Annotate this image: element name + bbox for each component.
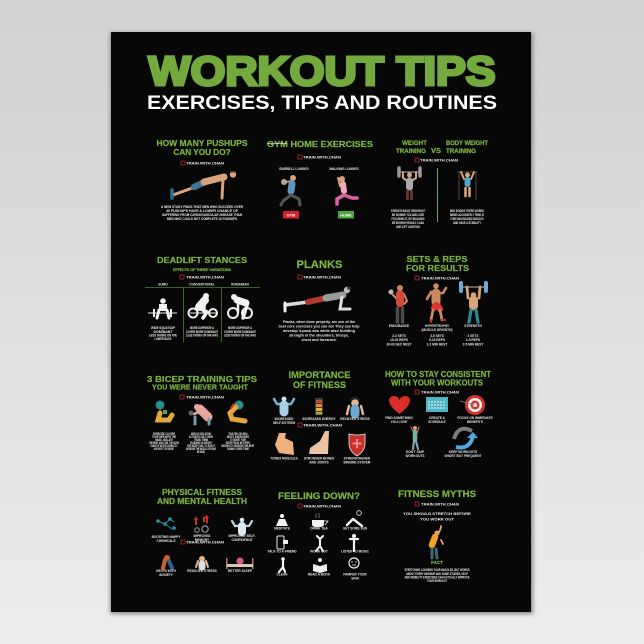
labels: SHORT BUT FREQUENT <box>444 454 482 458</box>
text block <box>149 326 177 341</box>
badge: TRAIN.WITH.CHAN <box>186 275 225 279</box>
text block: THE BICEP CURL TO ROW IT <box>187 444 215 448</box>
subheading: EFFECTS OF THREE VARIATIONS <box>173 268 232 272</box>
icon: walking lunge figure <box>337 176 357 204</box>
icon: flexing torso <box>232 518 252 532</box>
heading: FITNESS MYTHS <box>398 489 476 499</box>
text block <box>186 326 218 338</box>
text block <box>404 568 470 583</box>
badge: TRAIN.WITH.CHAN <box>303 155 342 159</box>
icon: mask face <box>349 558 359 568</box>
labels: IMPROVED SELF- <box>228 534 256 538</box>
text block: MUSCLE ISOLATION <box>191 432 211 436</box>
text block: TRAIN THE LONG HEAD <box>228 432 248 436</box>
gym button: GYM <box>287 213 295 217</box>
icon: cycle arrows <box>454 429 478 448</box>
text block: AND HAVE A STABILITY <box>453 221 482 225</box>
labels: SELF-ESTEEM <box>273 421 295 425</box>
text block: SUFFERING FROM CARDIOVASCULAR DISEASE THAN <box>162 213 243 217</box>
text block: WIDE SQUATSUP <box>151 326 176 330</box>
rep numbers: 3 SETS <box>468 334 478 338</box>
labels: ANXIETY <box>159 573 174 577</box>
rep numbers: 2-5 MIN REST <box>463 342 483 346</box>
labels: REDUCED STRESS <box>187 569 217 573</box>
text block: AND MOBILITY EXERCISES CAN ACTUALLY IMPROVE <box>404 576 470 580</box>
column labels: STRENGTH <box>464 324 482 328</box>
rep numbers: 3-5 SETS <box>430 334 444 338</box>
icon: flexed arm <box>230 400 245 421</box>
icon: molecule <box>157 518 175 529</box>
myth statement: YOU SHOULD STRETCH BEFORE <box>403 512 472 516</box>
text block: YOUR WORKOUT <box>427 579 447 583</box>
labels: READ A BOOK <box>308 572 331 576</box>
panel: gym home exercises <box>267 139 373 218</box>
icon: read book <box>313 558 327 573</box>
icon: calendar <box>426 397 448 412</box>
labels: RELIEVES STRESS <box>340 417 370 421</box>
text block: THE BENT AND CURL THE MOVE <box>149 441 179 445</box>
labels: FIND SOMETHING <box>385 416 413 420</box>
icon: muscular torso <box>274 396 294 412</box>
column labels: ROMANIAN <box>231 282 249 286</box>
panel: importance of fitness <box>270 370 371 464</box>
heading <box>396 140 488 155</box>
heading <box>157 488 247 506</box>
labels: SCHEDULE <box>428 420 446 424</box>
icon: tea cup <box>312 513 328 527</box>
heading: HOW TO STAY CONSISTENT <box>385 370 491 379</box>
panel: deadlift stances <box>145 255 260 342</box>
heading: AND MENTAL HEALTH <box>157 497 247 506</box>
heading: FOR RESULTS <box>406 263 469 273</box>
text block: develop 4-pack abs while also building <box>283 328 356 333</box>
text block <box>149 432 179 451</box>
labels <box>152 534 256 543</box>
labels <box>270 456 371 464</box>
column labels: CONVENTIONAL <box>189 282 215 286</box>
rep numbers: 1-5 REPS <box>466 338 480 342</box>
badge: TRAIN.WITH.CHAN <box>186 161 225 165</box>
icon: anxious person <box>163 555 172 568</box>
text block: EXERCISE CLOSER <box>153 432 176 436</box>
text block: AND LIFT LIGHTING <box>396 225 420 229</box>
heading <box>147 374 257 392</box>
icon: arm with weight <box>156 400 172 420</box>
labels: LISTEN TO MUSIC <box>341 550 370 554</box>
rep numbers: 1-2 MIN REST <box>427 342 447 346</box>
text block: LOWER BACK <box>154 337 172 341</box>
labels <box>273 417 370 425</box>
column labels: ENDURANCE <box>389 324 409 328</box>
text block <box>186 432 216 454</box>
badge: TRAIN.WITH.CHAN <box>303 275 342 279</box>
icon: barbell lunge figure <box>281 175 300 205</box>
text block: HAND, ISOLATE <box>155 438 173 442</box>
icon: weight training figure <box>399 168 420 199</box>
heading: WEIGHT <box>402 140 427 147</box>
labels: WORKOUTS <box>406 454 424 458</box>
rep numbers: 30-60 SEC REST <box>387 342 412 346</box>
table lines <box>145 288 260 342</box>
text block <box>161 205 244 221</box>
labels: DRINK TEA <box>310 526 328 530</box>
text block: ABOUT EVERY WARMUP AND SOME STUDIES, HELP <box>406 572 469 576</box>
text block: INCREASE THE MUSCLE STRONG <box>186 447 216 451</box>
icon: endurance figure <box>388 285 407 322</box>
labels: AND JOINTS <box>309 460 329 464</box>
labels <box>277 572 367 580</box>
labels: MEMORY <box>195 538 210 542</box>
labels: IMPROVED <box>193 534 211 538</box>
home button: HOME <box>340 213 352 217</box>
labels: BENEFITS <box>467 420 483 424</box>
labels: INCREASED <box>275 417 294 421</box>
icon: bed <box>226 558 254 569</box>
heading: YOU WERE NEVER TAUGHT <box>152 384 249 392</box>
rep numbers: 15-20 REPS <box>390 338 408 342</box>
labels: KEEP WORKOUTS <box>449 450 477 454</box>
text block <box>278 319 360 342</box>
labels: TALK TO A FRIEND <box>267 550 297 554</box>
panel: how to stay consistent <box>385 370 493 458</box>
labels: FOCUS ON IMMEDIATE <box>457 416 493 420</box>
icon: seated curl figure <box>188 404 209 424</box>
heading: DEADLIFT STANCES <box>157 255 247 265</box>
icon: meditate <box>276 514 288 526</box>
icon: work out <box>316 536 323 551</box>
heading <box>288 370 350 390</box>
heading: HOW MANY PUSHUPS <box>156 139 248 148</box>
labels: STRONGER BONES <box>304 456 334 460</box>
text block: STRENGTH BUILDS THROUGHOUT <box>391 209 425 213</box>
icon: target <box>460 395 485 415</box>
text block: BE SIGNING YOU AND LOSE <box>392 213 424 217</box>
heading <box>406 254 469 273</box>
rep numbers <box>387 334 483 346</box>
heading: WITH YOUR WORKOUTS <box>391 378 484 388</box>
labels: CLEAN <box>277 572 288 576</box>
icon: romanian deadlift <box>228 294 252 318</box>
text block: BEING ACCURATELY TEND IS <box>450 213 484 217</box>
labels: DON'T SKIP <box>406 450 425 454</box>
panel: physical fitness and mental health <box>152 488 256 577</box>
icon: clean <box>279 557 285 572</box>
labels <box>385 416 493 424</box>
labels: PAMPER YOUR <box>343 572 367 576</box>
myth statement <box>403 512 472 522</box>
text block: strength in the shoulders, triceps, <box>289 332 349 338</box>
icon: strength figure <box>460 283 487 322</box>
panel: sets and reps <box>387 254 487 346</box>
icon: listen <box>350 534 358 551</box>
labels: HELPS WITH <box>156 569 177 573</box>
label: WALKING LUNGES <box>329 167 359 171</box>
text block: LESS TAXING ON THE HIPS <box>224 334 256 338</box>
badge: TRAIN.WITH.CHAN <box>421 390 460 394</box>
labels: WORK OUT <box>310 550 328 554</box>
text block: TO TARGET YOUR <box>230 438 246 442</box>
poster black panel <box>111 32 531 612</box>
text block: chest and forearms! <box>302 337 336 342</box>
text block: LESS TAXING ON THE HIPS <box>186 334 218 338</box>
icon: bones and joints <box>309 431 329 454</box>
text block: LESS TAXING ON THE <box>149 334 177 338</box>
icon: sumo deadlift <box>148 298 177 318</box>
labels <box>406 450 482 458</box>
text block: BICEP PEAK IN EVERY <box>226 441 251 445</box>
heading <box>156 139 248 157</box>
rep numbers: 2-3 SETS <box>392 334 406 338</box>
panel: planks <box>278 259 360 342</box>
text block: 40 PUSHUPS HAVE A LOWER CHANCE OF <box>166 209 238 213</box>
column labels: HYPERTROPHY <box>425 324 450 328</box>
text block: TOGETHER WITH THE <box>152 435 176 439</box>
title: WORKOUT TIPS <box>148 48 495 94</box>
labels: YOU LOVE <box>391 420 407 424</box>
heading: FEELING DOWN? <box>278 491 360 502</box>
text block: MOST EXERCISES <box>227 435 249 439</box>
icon: heart <box>389 396 410 414</box>
heading: BODY WEIGHT <box>446 140 488 147</box>
panel: weight vs body weight <box>391 140 488 229</box>
badge: TRAIN.WITH.CHAN <box>420 158 459 162</box>
text block: FOCUSING IT, BY BUILDING <box>392 217 425 221</box>
labels: INCREASED ENERGY <box>302 417 336 421</box>
labels <box>274 526 368 530</box>
heading <box>385 370 491 388</box>
text block: TRAIN THEM <box>194 438 208 442</box>
labels <box>156 569 253 577</box>
text block: RANGE OF MOTION CORRECTLY <box>150 444 178 448</box>
labels: SKIN <box>351 576 360 580</box>
panel: how many pushups <box>156 139 248 221</box>
heading: TRAINING <box>446 148 476 155</box>
column labels: SUMO <box>158 282 168 286</box>
icon: plank figure <box>285 286 351 311</box>
text block: COVER MORE DOMINANT <box>186 330 218 334</box>
text block: WAY BODIES THESE WORKS <box>450 209 484 213</box>
rep numbers: 6-15 REPS <box>429 338 445 342</box>
text block: BE MOVING HEAVILY LOAD <box>392 221 425 225</box>
labels: IMMUNE SYSTEM <box>344 460 371 464</box>
heading: CAN YOU DO? <box>173 148 231 157</box>
icon: pushup figure <box>172 171 236 198</box>
icon: improved arrows <box>194 515 209 532</box>
fact label: FACT <box>431 560 443 565</box>
text block: best core exercises you can do! They can help <box>278 324 360 328</box>
labels: MEDITATE <box>274 526 290 530</box>
icon: stretching figure <box>432 526 443 558</box>
heading: SETS & REPS <box>406 254 468 264</box>
heading: IMPORTANCE <box>288 370 350 380</box>
labels: CHEMICALS <box>157 539 175 543</box>
labels: GET SOME SUN <box>343 526 368 530</box>
icon: stressed person <box>347 398 363 414</box>
heading: PLANKS <box>296 259 342 271</box>
text block: A NEW STUDY FINDS THAT MEN WHO SUCCEED OVER <box>161 205 244 209</box>
labels: CREATE A <box>429 416 446 420</box>
text block: MORE SUPERIOR & <box>228 326 253 330</box>
icon: conventional deadlift <box>188 293 217 318</box>
icon: workout figure <box>411 426 419 449</box>
heading: VS <box>431 146 441 155</box>
heading: 3 BICEP TRAINING TIPS <box>147 374 257 384</box>
label: BARBELL LUNGES <box>279 167 309 171</box>
heading: OF FITNESS <box>293 380 346 390</box>
icon: pull up figure <box>458 172 477 200</box>
poster shadow <box>110 33 533 614</box>
heading: GYM HOME EXERCISES <box>267 139 373 149</box>
icon: hypertrophy figure <box>427 283 446 322</box>
text block: IN MIND <box>197 450 205 454</box>
heading: TRAINING <box>396 148 426 155</box>
labels <box>267 550 370 554</box>
icon: immune shield <box>349 434 365 456</box>
myth statement: YOU WORK OUT <box>420 518 455 522</box>
labels: CONFIDENCE <box>231 538 253 542</box>
icon: stressed person <box>196 556 208 567</box>
text block <box>450 209 484 225</box>
icon: energy battery <box>315 398 323 415</box>
text block: ACTIVATES ONLY THESE <box>189 435 213 439</box>
labels: BETTER SLEEP <box>228 569 253 573</box>
icon: flexed muscle <box>275 433 294 455</box>
text block: COVER MORE DOMINANT <box>224 330 256 334</box>
panel: bicep tips <box>147 374 257 454</box>
column labels: (MUSCLE GROWTH) <box>422 328 452 332</box>
text block <box>222 432 255 451</box>
text block: CORE AND BUILDING MUSCLES <box>450 217 484 221</box>
text block: WORKOUT SESSION FOR BEST <box>222 444 255 448</box>
badge: TRAIN.WITH.CHAN <box>303 504 342 508</box>
column labels <box>158 282 249 286</box>
text block: Planks, when done properly, are one of the <box>283 319 356 324</box>
text block: MORE SUPERIOR & <box>190 326 215 330</box>
labels: BOOSTING HAPPY <box>152 535 181 539</box>
labels: TONES MUSCLES <box>270 456 298 460</box>
badge: TRAIN.WITH.CHAN <box>303 423 343 427</box>
subtitle: EXERCISES, TIPS AND ROUTINES <box>147 93 497 114</box>
panel: fitness myths <box>398 489 476 583</box>
labels: STRENGTHENED <box>344 456 371 460</box>
badge: TRAIN.WITH.CHAN <box>421 502 460 506</box>
text block: STANDING ON WEIGHT <box>190 441 212 445</box>
badge: TRAIN.WITH.CHAN <box>421 276 460 280</box>
text block: AND MOVE TO THE WEIGHT <box>154 447 174 451</box>
panel: feeling down <box>267 491 370 580</box>
badge: TRAIN.WITH.CHAN <box>186 395 225 399</box>
badge: TRAIN.WITH.CHAN <box>186 540 225 544</box>
icon: phone <box>277 536 288 549</box>
text block <box>224 326 256 338</box>
text block: STRETCHING LOOSENS YOUR MUSCLES, BUT WORKS <box>404 568 470 572</box>
divider <box>436 168 438 222</box>
text block: DOMINANT <box>154 330 173 334</box>
text block: GAINS OVER TIME <box>227 447 249 451</box>
column labels <box>389 324 482 332</box>
icon: sun lounging <box>347 511 362 526</box>
heading: PHYSICAL FITNESS <box>162 488 243 497</box>
text block <box>391 209 425 229</box>
text block: MEN WHO COULD NOT COMPLETE 10 PUSHUPS <box>167 217 237 221</box>
